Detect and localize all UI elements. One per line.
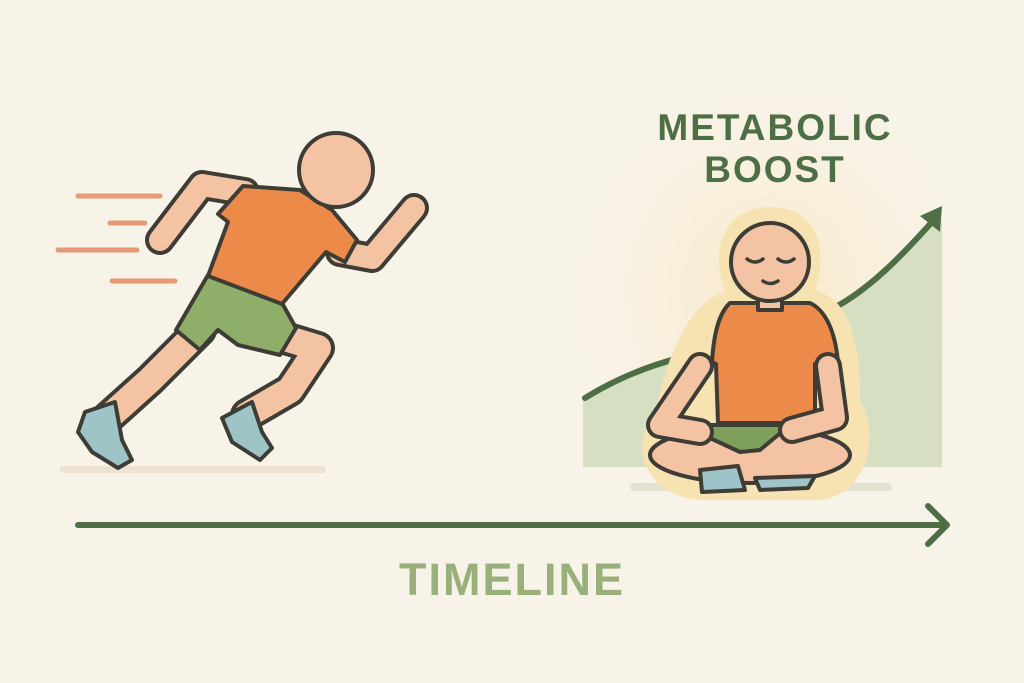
legs	[650, 427, 850, 483]
title: METABOLIC	[657, 107, 893, 148]
title	[657, 107, 893, 190]
head	[758, 290, 782, 310]
speed lines	[58, 196, 175, 281]
arms	[660, 366, 700, 432]
shorts	[176, 275, 296, 355]
head	[299, 133, 373, 207]
right arm	[340, 208, 414, 258]
back leg	[100, 330, 200, 425]
timeline label: TIMELINE	[399, 554, 625, 605]
timeline arrow	[78, 506, 947, 544]
runner	[60, 133, 414, 473]
shorts	[682, 425, 790, 452]
shirt	[712, 303, 838, 423]
chart: metabolic area	[583, 206, 942, 467]
shirt	[208, 186, 357, 304]
halo	[642, 207, 870, 500]
left arm	[160, 185, 245, 240]
front leg	[247, 335, 318, 415]
title: BOOST	[704, 149, 846, 190]
meditating figure	[630, 207, 892, 500]
